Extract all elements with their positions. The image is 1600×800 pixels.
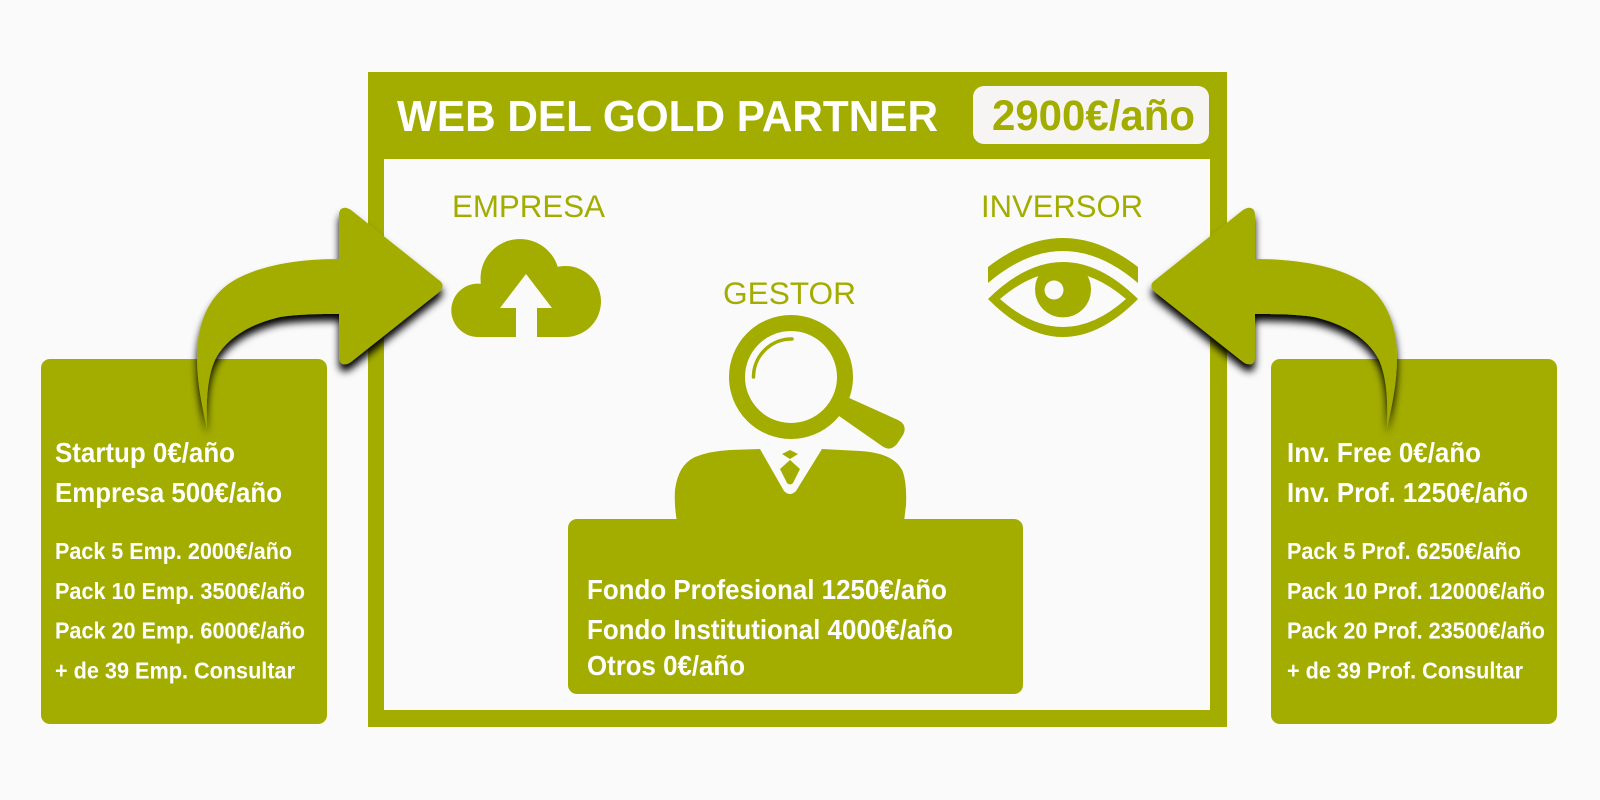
icon: eye [988, 238, 1138, 337]
icon: gestor with magnifier [675, 323, 906, 522]
panel: empresa prices: Startup 0€/año [55, 437, 235, 468]
heading: web del gold partner: WEB DEL GOLD PARTNER [397, 92, 938, 141]
panel: gestor prices: Otros 0€/año [587, 650, 745, 681]
label: gestor: GESTOR [723, 275, 856, 311]
panel: empresa prices: Pack 5 Emp. 2000€/año [55, 538, 292, 564]
person body [675, 449, 906, 522]
panel: gestor prices: Fondo Profesional 1250€/año [587, 574, 947, 605]
label: empresa: EMPRESA [452, 188, 605, 224]
panel: inversor prices: + de 39 Prof. Consultar [1287, 658, 1523, 684]
label: inversor: INVERSOR [981, 188, 1143, 224]
panel: inversor prices: Inv. Free 0€/año [1287, 437, 1481, 468]
panel: inversor prices: Pack 20 Prof. 23500€/año [1287, 618, 1545, 644]
panel: empresa prices: Empresa 500€/año [55, 477, 282, 508]
icon: cloud upload [451, 239, 601, 338]
price badge: 2900€/año [992, 92, 1195, 140]
arrow: inversor panel to eye [1151, 208, 1397, 428]
arrow: empresa panel to cloud [197, 208, 443, 428]
panel: gestor prices: Fondo Institutional 4000€/año [587, 614, 953, 645]
panel: empresa prices: Pack 10 Emp. 3500€/año [55, 578, 305, 604]
panel: inversor prices [1271, 359, 1557, 724]
panel: empresa prices: + de 39 Emp. Consultar [55, 658, 295, 684]
tie [780, 450, 800, 484]
panel: inversor prices: Pack 10 Prof. 12000€/año [1287, 578, 1545, 604]
panel: inversor prices: Inv. Prof. 1250€/año [1287, 477, 1528, 508]
magnifier [737, 323, 905, 449]
panel: gestor prices [568, 519, 1023, 694]
panel: empresa prices: Pack 20 Emp. 6000€/año [55, 618, 305, 644]
panel: web frame [368, 72, 1227, 727]
panel: empresa prices [41, 359, 327, 724]
panel: inversor prices: Pack 5 Prof. 6250€/año [1287, 538, 1521, 564]
